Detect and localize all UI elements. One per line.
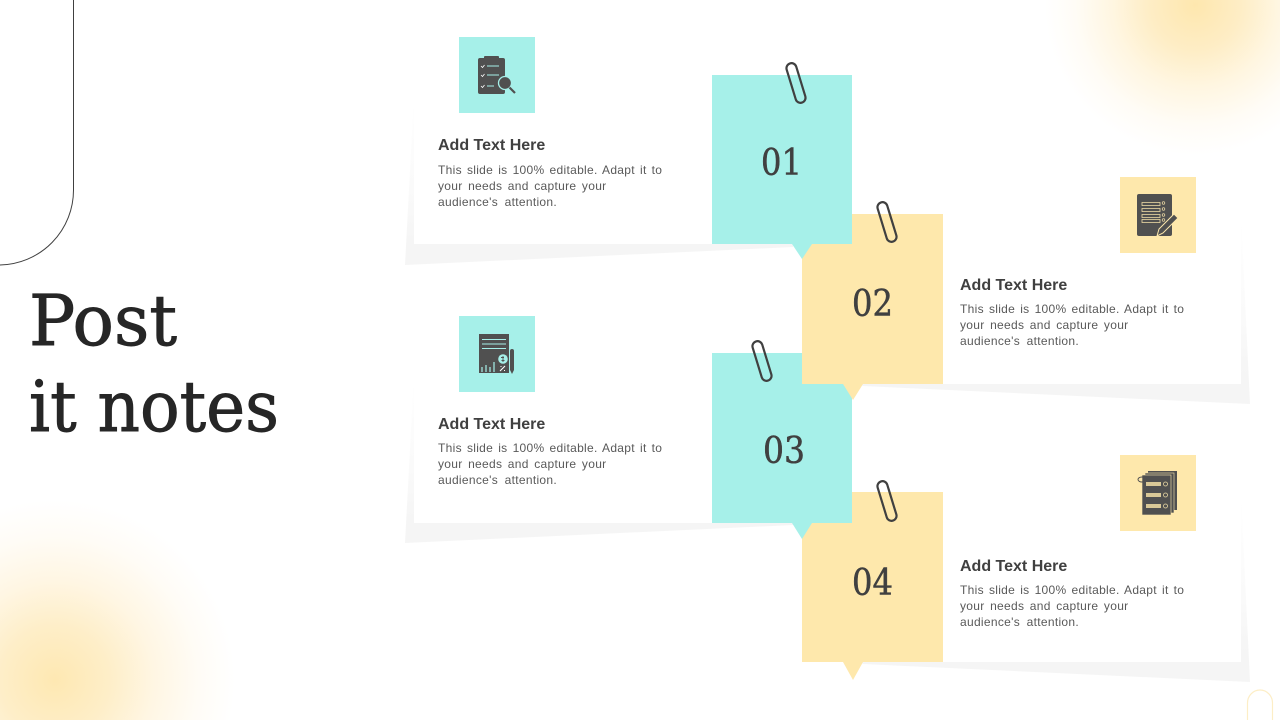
title — [29, 280, 279, 448]
icon: paperclip 03 — [751, 340, 773, 382]
title: Post — [29, 280, 177, 362]
icon: financial report with pen — [459, 316, 535, 392]
icon: clipboard with magnifier — [459, 37, 535, 113]
post-it 04 — [802, 492, 943, 680]
title: it notes — [29, 366, 279, 448]
text block 04: This slide is 100% editable. Adapt it to — [960, 583, 1184, 597]
text block 01: This slide is 100% editable. Adapt it to — [438, 163, 662, 177]
background glow: bottom left — [0, 495, 240, 720]
decorative arc: bottom right — [1248, 690, 1272, 720]
icon: document with pencil — [1120, 177, 1196, 253]
panel: note shadow 3 — [405, 374, 793, 543]
text block 03: your needs and capture your — [438, 457, 606, 471]
icon: stacked checklist pages — [1120, 455, 1196, 531]
text block 02: your needs and capture your — [960, 318, 1128, 332]
icon: paperclip 04 — [876, 480, 898, 522]
text block 01 — [438, 137, 662, 209]
text block 01: Add Text Here — [438, 137, 545, 154]
text block 02 — [960, 277, 1184, 348]
icon: paperclip 01 — [785, 62, 807, 104]
text block 03: This slide is 100% editable. Adapt it to — [438, 441, 662, 455]
number 03: 03 — [763, 431, 805, 472]
post-it 02 — [802, 214, 943, 400]
text block 02: Add Text Here — [960, 277, 1067, 294]
post-it 01 — [712, 75, 852, 259]
number 04: 04 — [852, 563, 893, 604]
text block 04: audience's attention. — [960, 615, 1079, 629]
icon: paperclip 02 — [876, 201, 898, 243]
text block 04 — [960, 558, 1184, 629]
background glow: top right — [1040, 0, 1280, 170]
post-it 03 — [712, 353, 852, 539]
panel: note shadow 4 — [860, 494, 1250, 682]
panel: note shadow 1 — [405, 95, 793, 265]
text block 04: your needs and capture your — [960, 599, 1128, 613]
panel: note shadow 2 — [860, 215, 1250, 404]
text block 03 — [438, 416, 662, 487]
number 02: 02 — [852, 284, 893, 325]
text block 03: audience's attention. — [438, 473, 557, 487]
text block 02: audience's attention. — [960, 334, 1079, 348]
number 01: 01 — [761, 143, 802, 184]
text block 04: Add Text Here — [960, 558, 1067, 575]
decorative arc: top left — [0, 0, 74, 265]
text block 02: This slide is 100% editable. Adapt it to — [960, 302, 1184, 316]
text block 01: audience's attention. — [438, 195, 557, 209]
text block 03: Add Text Here — [438, 416, 545, 433]
text block 01: your needs and capture your — [438, 179, 606, 193]
